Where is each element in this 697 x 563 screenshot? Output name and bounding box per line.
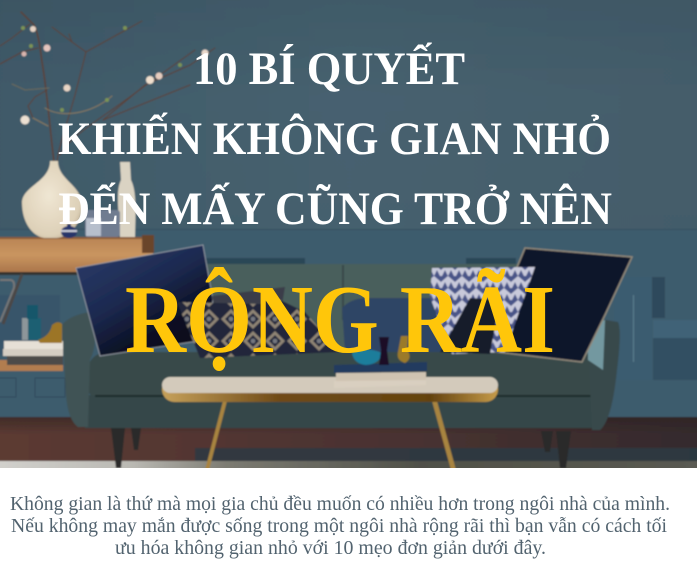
small blue pot	[61, 224, 77, 238]
left arm	[62, 312, 95, 427]
purple vase	[379, 337, 389, 365]
ikat striped pillow	[430, 267, 535, 354]
table legs	[205, 401, 227, 470]
sofa back	[200, 264, 525, 356]
console table	[0, 235, 154, 324]
wall	[0, 0, 697, 417]
seat cushion	[88, 352, 592, 396]
title line 2: KHIẾN KHÔNG GIAN NHỎ	[58, 112, 611, 165]
rug	[0, 461, 697, 473]
sofa base	[85, 395, 595, 428]
patterned pillow	[177, 296, 340, 358]
highlighted title: RỘNG RÃI	[125, 266, 555, 373]
blossoms on branches	[20, 26, 208, 124]
grey ceramic pot	[85, 210, 120, 237]
stacked books	[334, 362, 427, 388]
sofa	[62, 264, 620, 468]
intro line 2: Nếu không may mắn được sống trong một ngôi nhà rộng rãi thì bạn vẫn có cách tối	[11, 515, 667, 537]
intro line 3: ưu hóa không gian nhỏ với 10 mẹo đơn giản dưới đây.	[115, 537, 546, 559]
teal glass bowl	[352, 350, 382, 365]
navy pillow left	[76, 245, 213, 356]
intro paragraph	[10, 493, 670, 559]
dark navy pillow right	[480, 248, 632, 362]
coffee table	[162, 377, 498, 470]
lower shelf with books	[0, 341, 63, 371]
blue pillow	[342, 298, 468, 352]
intro line 1: Không gian là thứ mà mọi gia chủ đều muốn có nhiều hơn trong ngôi nhà của mình.	[10, 493, 670, 515]
gold ornament	[38, 322, 62, 343]
title line 3: ĐẾN MẤY CŨNG TRỞ NÊN	[58, 182, 612, 235]
teal glass bottle	[22, 305, 41, 340]
lower wall panelling	[0, 229, 697, 417]
floor reflection	[195, 448, 697, 461]
title line 1: 10 BÍ QUYẾT	[193, 42, 465, 95]
white caption area	[0, 468, 697, 563]
large cream vase	[22, 161, 82, 238]
right arm	[588, 319, 620, 430]
sofa legs	[111, 428, 571, 468]
branches in vase	[0, 12, 215, 162]
small dark pillow	[212, 287, 285, 310]
title	[58, 42, 612, 235]
gold vase	[398, 336, 410, 363]
table top	[162, 377, 498, 402]
tall white bottle	[118, 162, 136, 237]
floor	[0, 417, 697, 461]
